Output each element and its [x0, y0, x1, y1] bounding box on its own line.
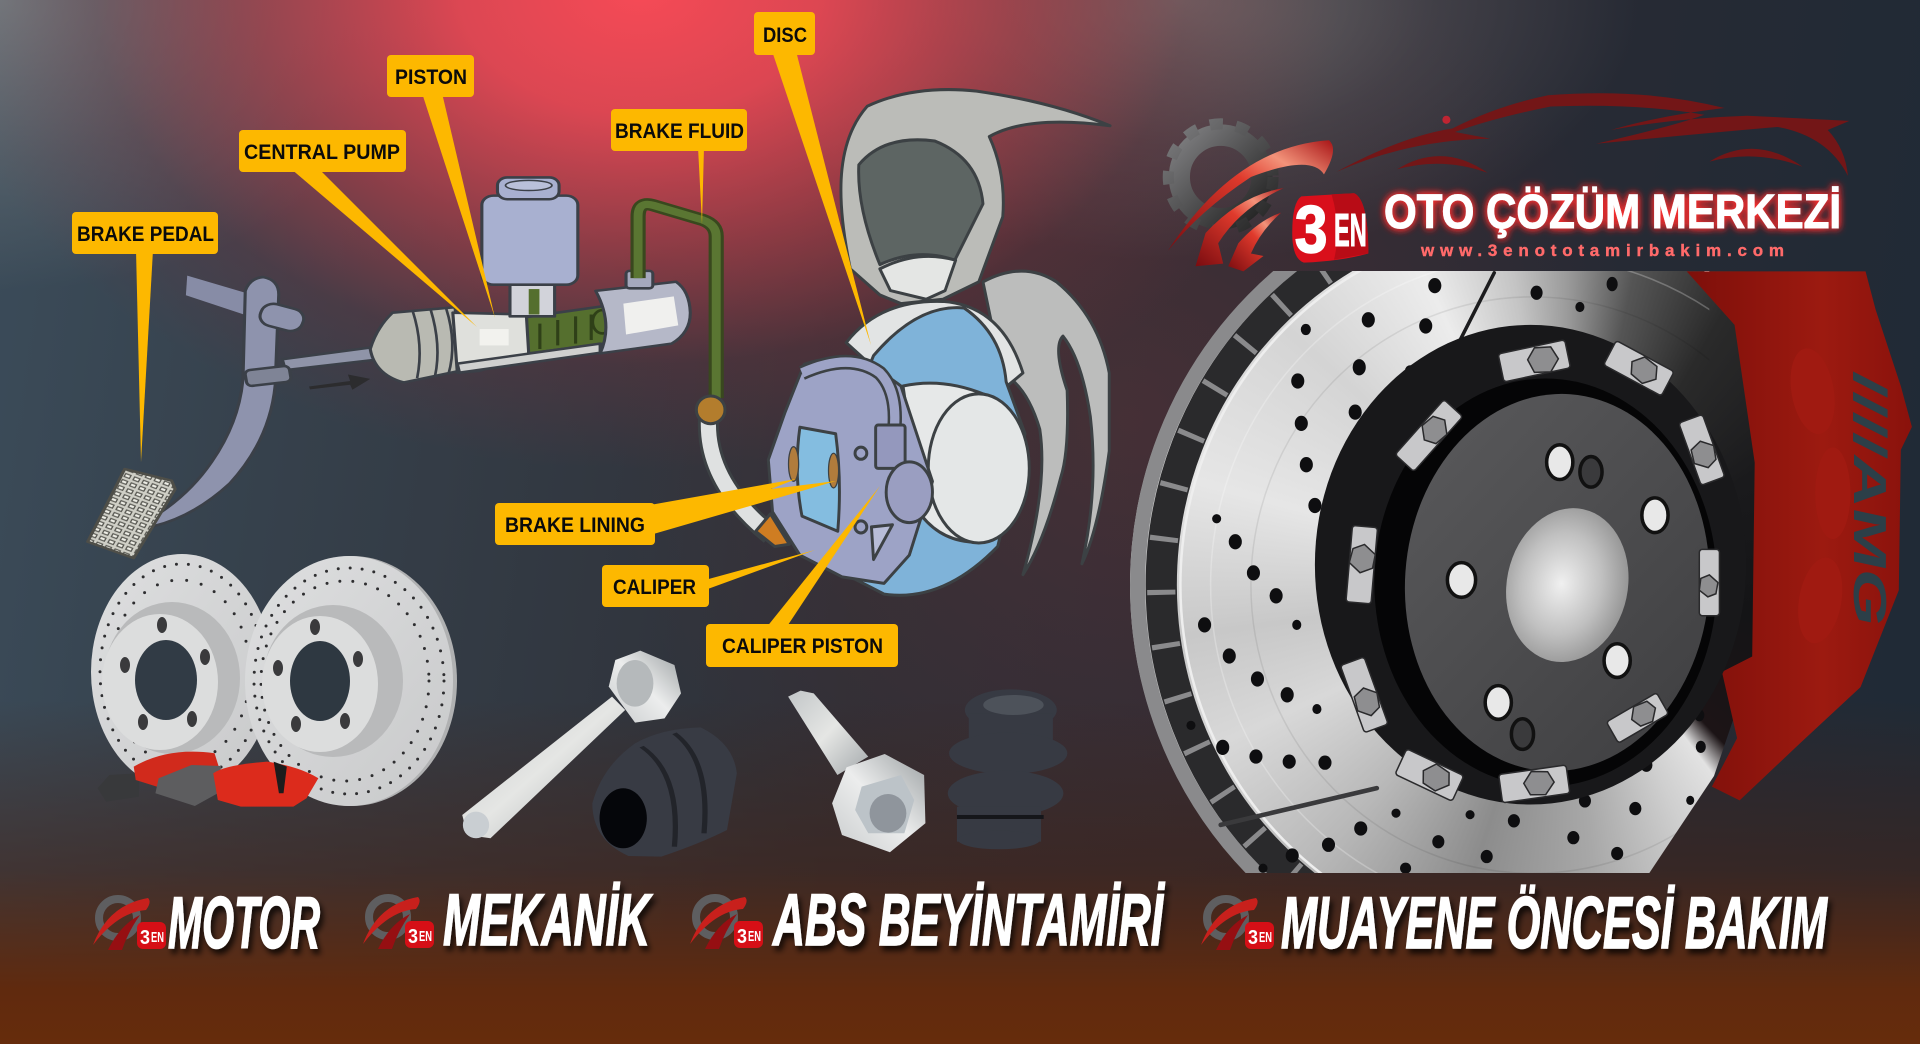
title: mekanik: MEKANİK — [443, 880, 653, 961]
yellow callout labels — [72, 12, 898, 667]
callout: brake pedal — [72, 212, 218, 462]
small logo: muayene: 3 — [1248, 927, 1258, 949]
rotor details, hub and caliper — [1130, 271, 1912, 873]
drilled holes — [1186, 277, 1707, 874]
brake pipe — [638, 204, 716, 398]
callout: caliper piston — [706, 486, 898, 667]
motion arrow — [309, 375, 370, 390]
callout: central pump: CENTRAL PUMP — [244, 141, 400, 164]
pedal pad — [88, 469, 175, 558]
caliper piston — [876, 425, 905, 468]
service titles — [168, 880, 1828, 964]
small logo: mekanik: EN — [419, 928, 432, 945]
callout: brake fluid — [611, 109, 747, 224]
logo car silhouette — [1337, 93, 1849, 176]
logo red swooshes — [1168, 140, 1333, 271]
mounting clips — [1340, 340, 1725, 803]
short guide pin — [788, 691, 925, 852]
small logo: muayene: EN — [1259, 929, 1272, 946]
callout: brake pedal: BRAKE PEDAL — [77, 223, 214, 246]
drilled rotors and brake pads — [91, 554, 457, 807]
header website: www.3enototamirbakim.com — [1420, 241, 1784, 260]
lug holes — [1447, 445, 1668, 749]
clevis — [245, 366, 291, 386]
callout: brake lining — [495, 479, 836, 545]
callout: disc: DISC — [763, 24, 807, 47]
AMG logo: ////AMG — [1844, 369, 1896, 632]
small logo: abs — [690, 897, 763, 949]
header title: OTO ÇÖZÜM MERKEZİ — [1384, 186, 1841, 239]
backing plate — [846, 301, 1023, 390]
logo badge: EN — [1334, 205, 1367, 256]
callout: central pump — [239, 130, 477, 327]
callout: piston — [387, 55, 495, 318]
long guide pin — [462, 651, 681, 838]
logo badge: 3 — [1295, 192, 1327, 267]
rear rotor — [91, 554, 273, 790]
callout: brake lining: BRAKE LINING — [505, 514, 645, 537]
fluid chamber — [526, 305, 618, 353]
push rod — [282, 347, 373, 370]
brake pedal and master cylinder diagram — [88, 177, 716, 558]
callout: brake fluid: BRAKE FLUID — [615, 120, 744, 143]
title: motor: MOTOR — [168, 883, 320, 964]
first rubber boot — [592, 727, 737, 857]
cylinder body — [453, 313, 529, 373]
callout: caliper — [602, 550, 815, 607]
hub ring — [1315, 325, 1746, 804]
reservoir neck — [510, 284, 555, 316]
small logo: motor — [93, 898, 166, 950]
small logo: abs: 3 — [737, 926, 747, 948]
right backing arc — [983, 271, 1109, 575]
callout: disc — [754, 12, 871, 345]
pedal stud — [257, 301, 307, 334]
callout: piston: PISTON — [395, 66, 467, 89]
red caliper — [1687, 271, 1912, 800]
outlet housing — [596, 282, 690, 353]
logo gear — [1168, 124, 1273, 230]
pedal bar — [186, 276, 245, 315]
small logo: motor: EN — [151, 929, 164, 946]
caliper guide pins and rubber boots — [462, 651, 1067, 857]
brake pads — [98, 752, 318, 807]
center cap — [1492, 497, 1642, 674]
hose fitting — [696, 396, 725, 424]
front rotor — [245, 556, 457, 806]
hub — [903, 383, 985, 542]
brake hose — [708, 419, 770, 534]
rotor face — [1130, 271, 1755, 873]
small logo: muayene — [1201, 898, 1274, 950]
pedal arm — [154, 277, 279, 526]
shield base — [880, 256, 956, 299]
caliper piston bulges — [1784, 345, 1841, 438]
small logo: motor: 3 — [140, 927, 150, 949]
rotor slots — [1221, 273, 1494, 825]
logo badge — [1292, 192, 1368, 267]
front rotor hat — [262, 605, 403, 757]
small logo: mekanik — [363, 897, 434, 949]
small logo: abs: EN — [748, 928, 761, 945]
caliper housing — [768, 359, 932, 583]
second rubber boot — [948, 689, 1067, 849]
large brake disc with red AMG caliper — [1130, 271, 1912, 873]
shield window — [859, 140, 983, 265]
brake caliper and wheel assembly diagram — [696, 90, 1110, 595]
title: abs beyin tamiri: ABS BEYİNTAMİRİ — [772, 880, 1165, 961]
caliper hose — [802, 362, 895, 425]
small logo: mekanik: 3 — [408, 926, 418, 948]
callout: caliper: CALIPER — [613, 576, 696, 599]
rear rotor hat — [102, 602, 240, 754]
boot — [370, 307, 460, 383]
rotor rim vents — [1130, 271, 1710, 873]
callout: caliper piston: CALIPER PISTON — [722, 635, 883, 658]
rotor blue — [825, 308, 1025, 595]
caliper pads — [797, 427, 839, 531]
reservoir — [482, 196, 578, 285]
hat plate — [1392, 383, 1722, 782]
wing shield — [841, 90, 1110, 304]
